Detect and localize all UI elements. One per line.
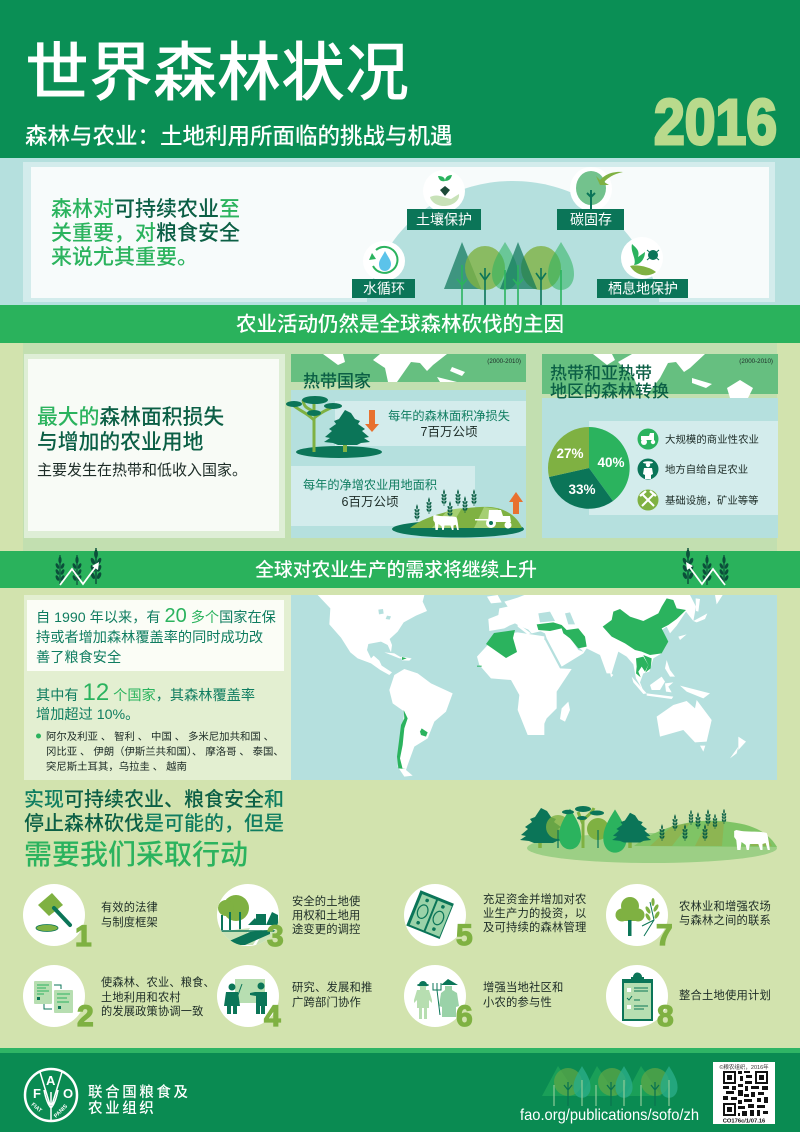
QR code: ©粮农组织，2016年 xyxy=(719,1063,769,1071)
icon: water cycle xyxy=(363,241,405,281)
label: carbon storage: 碳固存 xyxy=(570,212,612,228)
trees group xyxy=(444,242,574,306)
pie chart: 27% xyxy=(556,446,584,461)
section banner: demand xyxy=(0,548,800,588)
arrow: down xyxy=(365,410,379,432)
legend: commercial agriculture xyxy=(638,428,759,450)
heading: 最大的 xyxy=(37,406,99,429)
action 1: 有效的法律 xyxy=(101,900,158,914)
text: 12 countries: 12 个国家，其森林覆盖率 xyxy=(83,679,255,706)
map strip: (2000-2010) xyxy=(487,358,521,365)
action 8 xyxy=(606,965,771,1033)
legend: subsistence agriculture xyxy=(638,458,748,480)
statement text: 森林对 xyxy=(51,198,114,221)
country list: 突尼斯土耳其，乌拉圭 、 越南 xyxy=(46,760,187,773)
forest loss text xyxy=(388,408,510,439)
call to action heading: 需要我们采取行动 xyxy=(24,839,248,870)
header banner xyxy=(0,0,800,158)
action 6: 6 xyxy=(456,1000,473,1033)
year 2016: 2016 xyxy=(654,86,777,158)
label: soil protection: 土壤保护 xyxy=(416,212,472,228)
panel: tropical countries xyxy=(286,354,526,538)
action 2 xyxy=(23,965,215,1033)
action 2: 使森林、农业、粮食、 xyxy=(101,975,215,989)
action 8: 8 xyxy=(657,1000,674,1033)
footer trees xyxy=(542,1066,678,1106)
action 4: 研究、发展和推 xyxy=(292,980,372,994)
country list xyxy=(36,730,284,773)
action 1: 1 xyxy=(75,920,92,953)
call to action heading: 实现 xyxy=(24,788,64,811)
action 7: 农林业和增强农场 xyxy=(679,899,771,913)
text: over 20 countries: 20 多个国家在保 xyxy=(165,605,276,627)
section banner: demand: 全球对农业生产的需求将继续上升 xyxy=(255,559,537,580)
illustration: forest and farm landscape xyxy=(520,806,777,863)
text: over 20 countries: 善了粮食安全 xyxy=(36,649,121,666)
action 3 xyxy=(217,884,360,953)
arrow: up xyxy=(509,492,523,514)
statement text: 粮食安全 xyxy=(156,222,240,245)
action 7: 7 xyxy=(656,919,673,952)
map strip xyxy=(291,354,526,382)
section banner: agriculture xyxy=(0,305,800,343)
label: habitat protection: 栖息地保护 xyxy=(608,280,678,296)
map strip: (2000-2010) xyxy=(739,358,773,365)
title: 世界森林状况 xyxy=(25,37,409,109)
forest loss text: 7百万公顷 xyxy=(421,425,477,439)
illustration: farmland xyxy=(392,490,524,538)
action 8: 整合土地使用计划 xyxy=(679,988,771,1002)
heading: 热带国家 xyxy=(303,371,371,391)
action 3: 途变更的调控 xyxy=(292,922,360,936)
action 1 xyxy=(23,884,158,953)
panel: countries text xyxy=(24,595,291,780)
forest loss text: 每年的森林面积净损失 xyxy=(388,408,510,423)
action 5: 业生产力的投资，以 xyxy=(483,906,586,920)
farmland gain text: 6百万公顷 xyxy=(342,495,398,509)
call to action heading: 可持续农业、粮食安全和 xyxy=(64,789,284,811)
farmland gain text xyxy=(303,477,437,509)
heading: 地区的森林转换 xyxy=(550,382,669,401)
label: habitat protection xyxy=(597,279,688,298)
description: 主要发生在热带和低收入国家。 xyxy=(37,462,247,479)
footer xyxy=(0,1048,800,1132)
section background: deforestation xyxy=(23,343,777,551)
action 5: 5 xyxy=(456,919,473,952)
illustration: trees xyxy=(286,396,382,458)
world map xyxy=(291,595,777,780)
icon: wheat and rising arrow left xyxy=(55,548,102,585)
map strip xyxy=(542,354,778,398)
action 2: 的发展政策协调一致 xyxy=(101,1004,204,1018)
country list: 阿尔及利亚 、 智利 、 中国 、 多米尼加共和国 、 xyxy=(46,730,274,743)
text: over 20 countries: 持或者增加森林覆盖率的同时成功改 xyxy=(36,629,263,646)
text: 12 countries: 其中有 xyxy=(36,688,83,704)
legend: infrastructure xyxy=(638,490,759,510)
section banner: agriculture: 农业活动仍然是全球森林砍伐的主因 xyxy=(236,312,564,336)
statement text: 来说尤其重要。 xyxy=(51,246,198,269)
action 1: 与制度框架 xyxy=(101,915,158,929)
FAO logo xyxy=(25,1069,77,1121)
action 3: 安全的土地使 xyxy=(292,894,360,908)
legend: commercial agriculture: 大规模的商业性农业 xyxy=(665,433,759,446)
action 5: 充足资金并增加对农 xyxy=(483,892,586,906)
statement text: 关重要，对 xyxy=(51,222,156,245)
map west xyxy=(318,595,544,777)
map east xyxy=(530,595,746,758)
QR code: CO176c/1/07.16 xyxy=(723,1118,766,1124)
action 5 xyxy=(404,884,586,952)
action 4: 广跨部门协作 xyxy=(292,995,361,1009)
FAO logo: O xyxy=(63,1086,73,1101)
heading: 森林面积损失 xyxy=(99,406,224,429)
action 3: 用权和土地用 xyxy=(292,909,360,922)
FAO logo: A xyxy=(46,1073,56,1088)
action 2: 2 xyxy=(77,1000,94,1033)
subtitle: 森林与农业：土地利用所面临的挑战与机遇 xyxy=(25,124,453,149)
organisation name: 农业组织 xyxy=(88,1100,156,1117)
dome xyxy=(367,181,659,306)
icon: wheat and rising arrow right xyxy=(682,548,729,585)
label: soil protection xyxy=(407,209,481,230)
panel: forest conversion xyxy=(542,354,778,538)
pie chart xyxy=(548,427,630,509)
pie chart: 40% xyxy=(597,455,625,470)
map highlight: Algeria xyxy=(486,630,517,658)
action 5: 及可持续的森林管理 xyxy=(483,920,586,934)
text: 12 countries: 增加超过 10%。 xyxy=(36,707,139,723)
action 4 xyxy=(217,965,372,1033)
label: carbon storage xyxy=(557,209,624,230)
legend: subsistence agriculture: 地方自给自足农业 xyxy=(665,463,748,476)
action 7: 与森林之间的联系 xyxy=(679,913,771,927)
panel: largest forest loss xyxy=(24,354,285,538)
call to action heading: 停止森林砍伐 xyxy=(24,812,144,835)
action 7 xyxy=(606,884,771,952)
farmland gain text: 每年的净增农业用地面积 xyxy=(303,477,437,492)
country list: 冈比亚 、 伊朗（伊斯兰共和国）、 摩洛哥 、 泰国、 xyxy=(46,745,284,758)
legend: infrastructure: 基础设施，矿业等等 xyxy=(665,494,759,507)
call to action heading xyxy=(24,788,284,870)
heading: 与增加的农业用地 xyxy=(37,431,204,454)
statement text: 可持续农业至 xyxy=(114,198,240,221)
text: over 20 countries: 自 1990 年以来，有 xyxy=(36,610,165,626)
icon: soil protection xyxy=(423,170,465,212)
icon: habitat protection xyxy=(621,237,663,279)
call to action heading: 是可能的，但是 xyxy=(144,812,284,835)
action 3: 3 xyxy=(267,920,284,953)
action 6 xyxy=(404,965,563,1033)
FAO logo: F xyxy=(33,1086,41,1101)
action 4: 4 xyxy=(264,1000,281,1033)
label: water cycle xyxy=(352,279,415,298)
action 2: 土地利用和农村 xyxy=(101,990,181,1004)
FAO logo: FIAT xyxy=(30,1102,43,1115)
QR code xyxy=(713,1062,775,1124)
FAO logo: PANIS xyxy=(53,1103,69,1119)
pie chart: 33% xyxy=(568,482,596,497)
panel: forests are vital xyxy=(0,158,800,306)
action 6: 小农的参与性 xyxy=(483,995,552,1009)
organisation name: 联合国粮食及 xyxy=(88,1083,191,1101)
icon: carbon storage xyxy=(570,167,623,211)
label: water cycle: 水循环 xyxy=(363,280,405,296)
action 6: 增强当地社区和 xyxy=(483,980,563,994)
website URL: fao.org/publications/sofo/zh xyxy=(520,1107,699,1124)
heading: 热带和亚热带 xyxy=(550,364,652,383)
